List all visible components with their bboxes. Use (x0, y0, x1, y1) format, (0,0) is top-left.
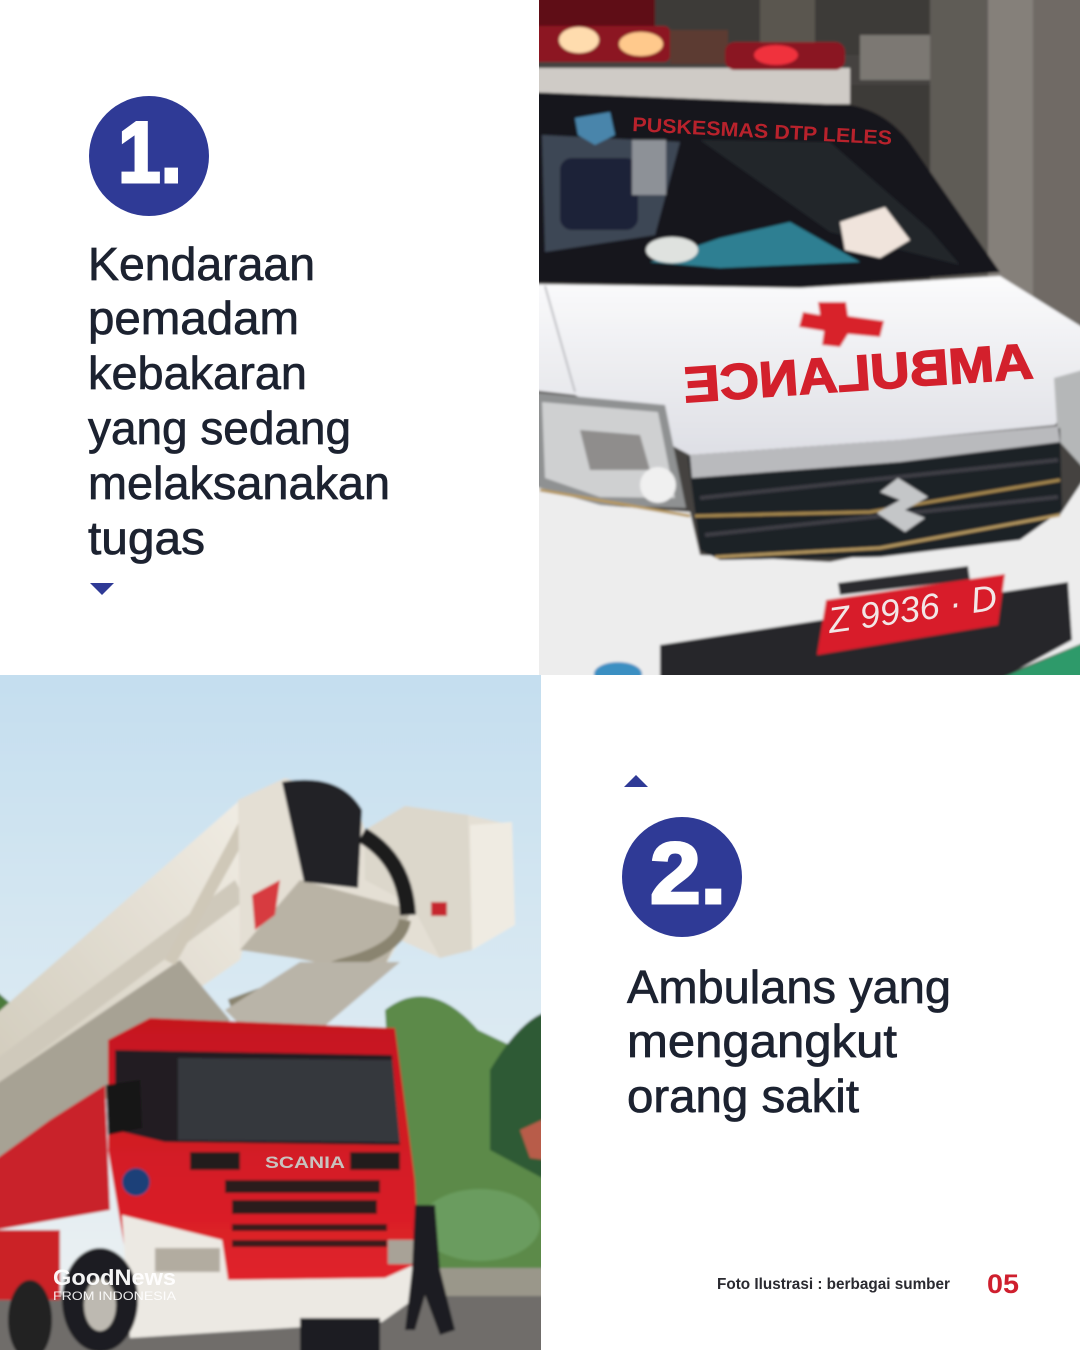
lower grille (660, 582, 1072, 685)
plate number: Z 9936 · D (824, 577, 999, 641)
hand at edge (520, 1118, 546, 1160)
heading: item 1 text: pemadam (88, 292, 299, 344)
heading: item 2 text: mengangkut (627, 1015, 897, 1067)
heading: item 1 text: kebakaran (88, 347, 307, 399)
heading: item 1 text: yang sedang (88, 402, 351, 454)
heading: item 1 text: tugas (88, 512, 205, 564)
truck cab (108, 1018, 420, 1280)
heading: item 1 text: melaksanakan (88, 457, 390, 509)
ladder boom (0, 802, 242, 1080)
icon: number badge 2 (622, 817, 742, 937)
heading: item 1 text (88, 238, 390, 564)
heading: item 2 text: orang sakit (627, 1070, 859, 1122)
icon: number badge 1: 1. (118, 105, 182, 201)
panel: fire truck photo (0, 670, 546, 1350)
suzuki badge (877, 478, 928, 532)
firefighter (405, 1205, 455, 1335)
arrow: pointing down to item (90, 583, 114, 595)
side body (0, 1085, 110, 1230)
wheels (62, 1248, 138, 1350)
watermark logo: FROM INDONESIA (53, 1289, 176, 1303)
bumper (122, 1215, 424, 1338)
red cross (799, 302, 884, 347)
heading: item 1 text: Kendaraan (88, 238, 315, 290)
mirrored ambulance text: AMBULANCE (682, 333, 1035, 413)
grille (688, 428, 1062, 560)
hood (530, 276, 1080, 455)
windshield caption: PUSKESMAS DTP LELES (632, 114, 893, 150)
light bar (530, 0, 655, 27)
icon: number badge 1 (89, 96, 209, 216)
icon: number badge 2: 2. (650, 826, 726, 922)
heading: item 2 text: Ambulans yang (627, 961, 951, 1013)
heading: item 2 text (627, 961, 951, 1122)
windshield (530, 92, 1000, 287)
trees (385, 996, 546, 1280)
scania wordmark: SCANIA (265, 1153, 345, 1172)
boom head (238, 778, 498, 961)
page number: 05 (987, 1269, 1019, 1299)
headlight left (530, 392, 686, 508)
watermark logo: GoodNews (53, 1265, 176, 1290)
source credit: Foto Ilustrasi : berbagai sumber (717, 1276, 950, 1293)
arrow: pointing up to item (624, 775, 648, 787)
panel: ambulance photo (530, 0, 1080, 686)
grille (190, 1152, 240, 1170)
licence plate (838, 566, 970, 595)
watermark logo (54, 1269, 176, 1300)
bumper body (539, 481, 1080, 675)
